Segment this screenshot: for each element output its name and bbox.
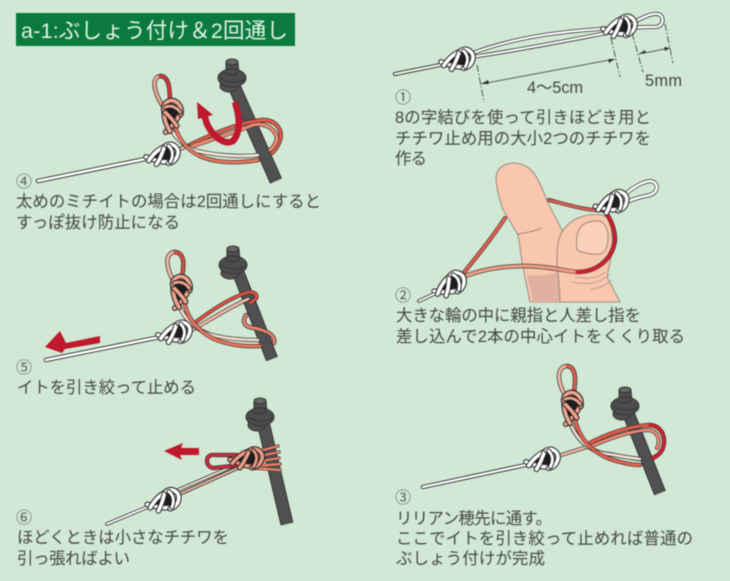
dimension: 4-5cm: 4〜5cm [527,79,583,97]
arrow: step 6 red [164,443,199,460]
arrow head [197,102,213,119]
panel: step 1 [395,14,682,168]
text: step 1 [395,109,651,168]
text: step 5: イトを引き絞って止める [17,379,196,397]
illustration: step 1 [395,14,663,74]
dimension: 4-5cm [477,38,620,102]
illustration: step 2 hand and line [419,163,657,302]
text: step 2: 大きな輪の中に親指と人差し指を [396,307,641,325]
text: step 4: 太めのミチイトの場合は2回通しにすると [16,193,321,211]
label 6: ⑥ [16,509,32,527]
title [16,13,295,46]
text: step 1: 作る [395,150,427,168]
arrow: step 5 red [45,331,100,353]
text: step 3: リリアン穂先に通す。 [396,510,552,528]
panel: step 6 [16,398,287,568]
text: step 3 [396,510,693,568]
illustration: step 4 rod and line [38,59,281,181]
title: a-1:ぶしょう付け＆2回通し [21,19,288,43]
label 2: ② [395,287,411,305]
text: step 2 [396,307,685,346]
panel: step 3 [395,366,693,568]
text: step 3: ここでイトを引き絞って止めれば普通の [396,530,693,548]
label 1: ① [395,89,411,107]
text: step 6: 引っ張ればよい [17,550,130,568]
label 5: ⑤ [16,359,32,377]
dimension: 5mm [632,24,682,90]
text: step 2: 差し込んで2本の中心イトをくくり取る [396,328,685,346]
text: step 6: ほどくときは小さなチチワを [17,529,229,547]
dimension: 5mm: 5mm [645,72,682,90]
panel: step 4 [16,59,321,232]
illustration: step 3 [423,366,664,493]
label 4: ④ [16,173,32,191]
arrow: step 4 red [203,102,239,142]
text: step 4 [16,193,321,232]
text: step 1: 8の字結びを使って引きほどき用と [395,109,651,127]
text: step 1: チチワ止め用の大小2つのチチワを [395,130,651,148]
panel: step 2 [395,163,685,346]
text: step 4: すっぽ抜け防止になる [16,214,180,232]
label 3: ③ [395,489,411,507]
panel: step 5 [16,246,274,397]
illustration: step 5 [46,246,274,360]
text: step 3: ぶしょう付けが完成 [396,550,545,568]
illustration: step 6 [107,398,287,524]
text: step 6 [17,529,229,568]
